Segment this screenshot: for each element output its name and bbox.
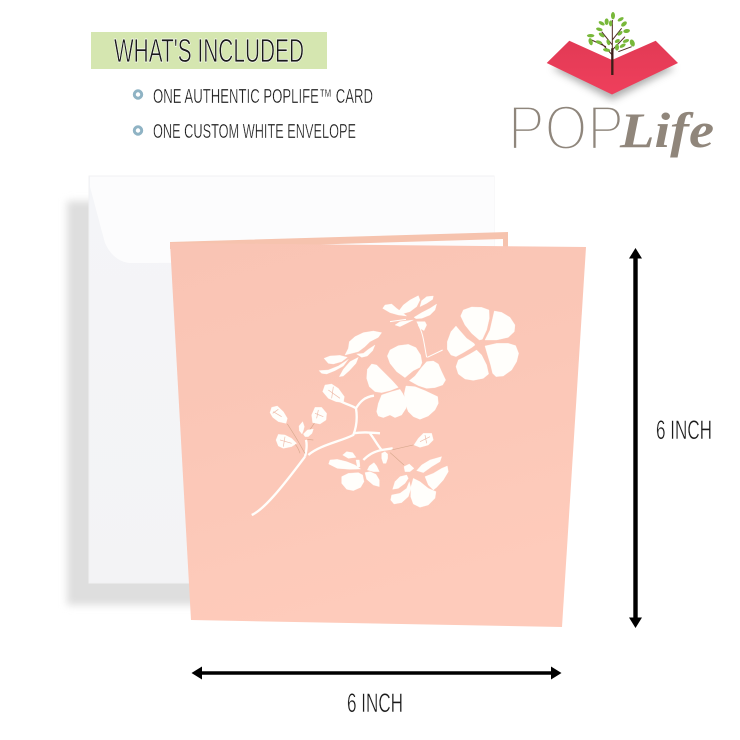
logo: PopLife [508,12,714,164]
logo wordmark: POP: POP [508,94,624,164]
width label: 6 INCH [347,688,403,718]
blossom: lower right flower [391,457,448,507]
envelope shadow [67,201,267,605]
blossom: branch [252,396,413,515]
blossom: buds and leaves [270,384,433,463]
card back panel [170,232,508,249]
logo wordmark: Life: Life [619,102,714,158]
card front panel [170,243,586,627]
logo emblem: red open book [547,41,678,100]
bullet item: envelope: ONE CUSTOM WHITE ENVELOPE [153,121,356,143]
blossom: top flower [383,296,443,357]
blossom: left flower [319,331,382,377]
greeting card [170,232,586,627]
bullet item: envelope [134,121,356,143]
envelope flap [90,176,494,263]
logo emblem: tree [587,12,636,75]
heading: what's included: WHAT'S INCLUDED [114,32,304,69]
bullet item: card [134,86,373,108]
blossom: centre flower [367,344,446,419]
blossom: lower left flower [329,452,379,491]
heading: what's included [91,32,327,69]
cut-out blossom artwork [252,296,519,515]
envelope [67,176,494,605]
height arrow [629,248,642,628]
flap shadow [130,264,300,266]
bullet item: card: ONE AUTHENTIC POPLIFE™ CARD [153,86,373,108]
blossom: right flower [447,307,519,380]
envelope body [89,176,494,583]
list of included items [134,86,373,143]
width arrow [192,666,562,680]
